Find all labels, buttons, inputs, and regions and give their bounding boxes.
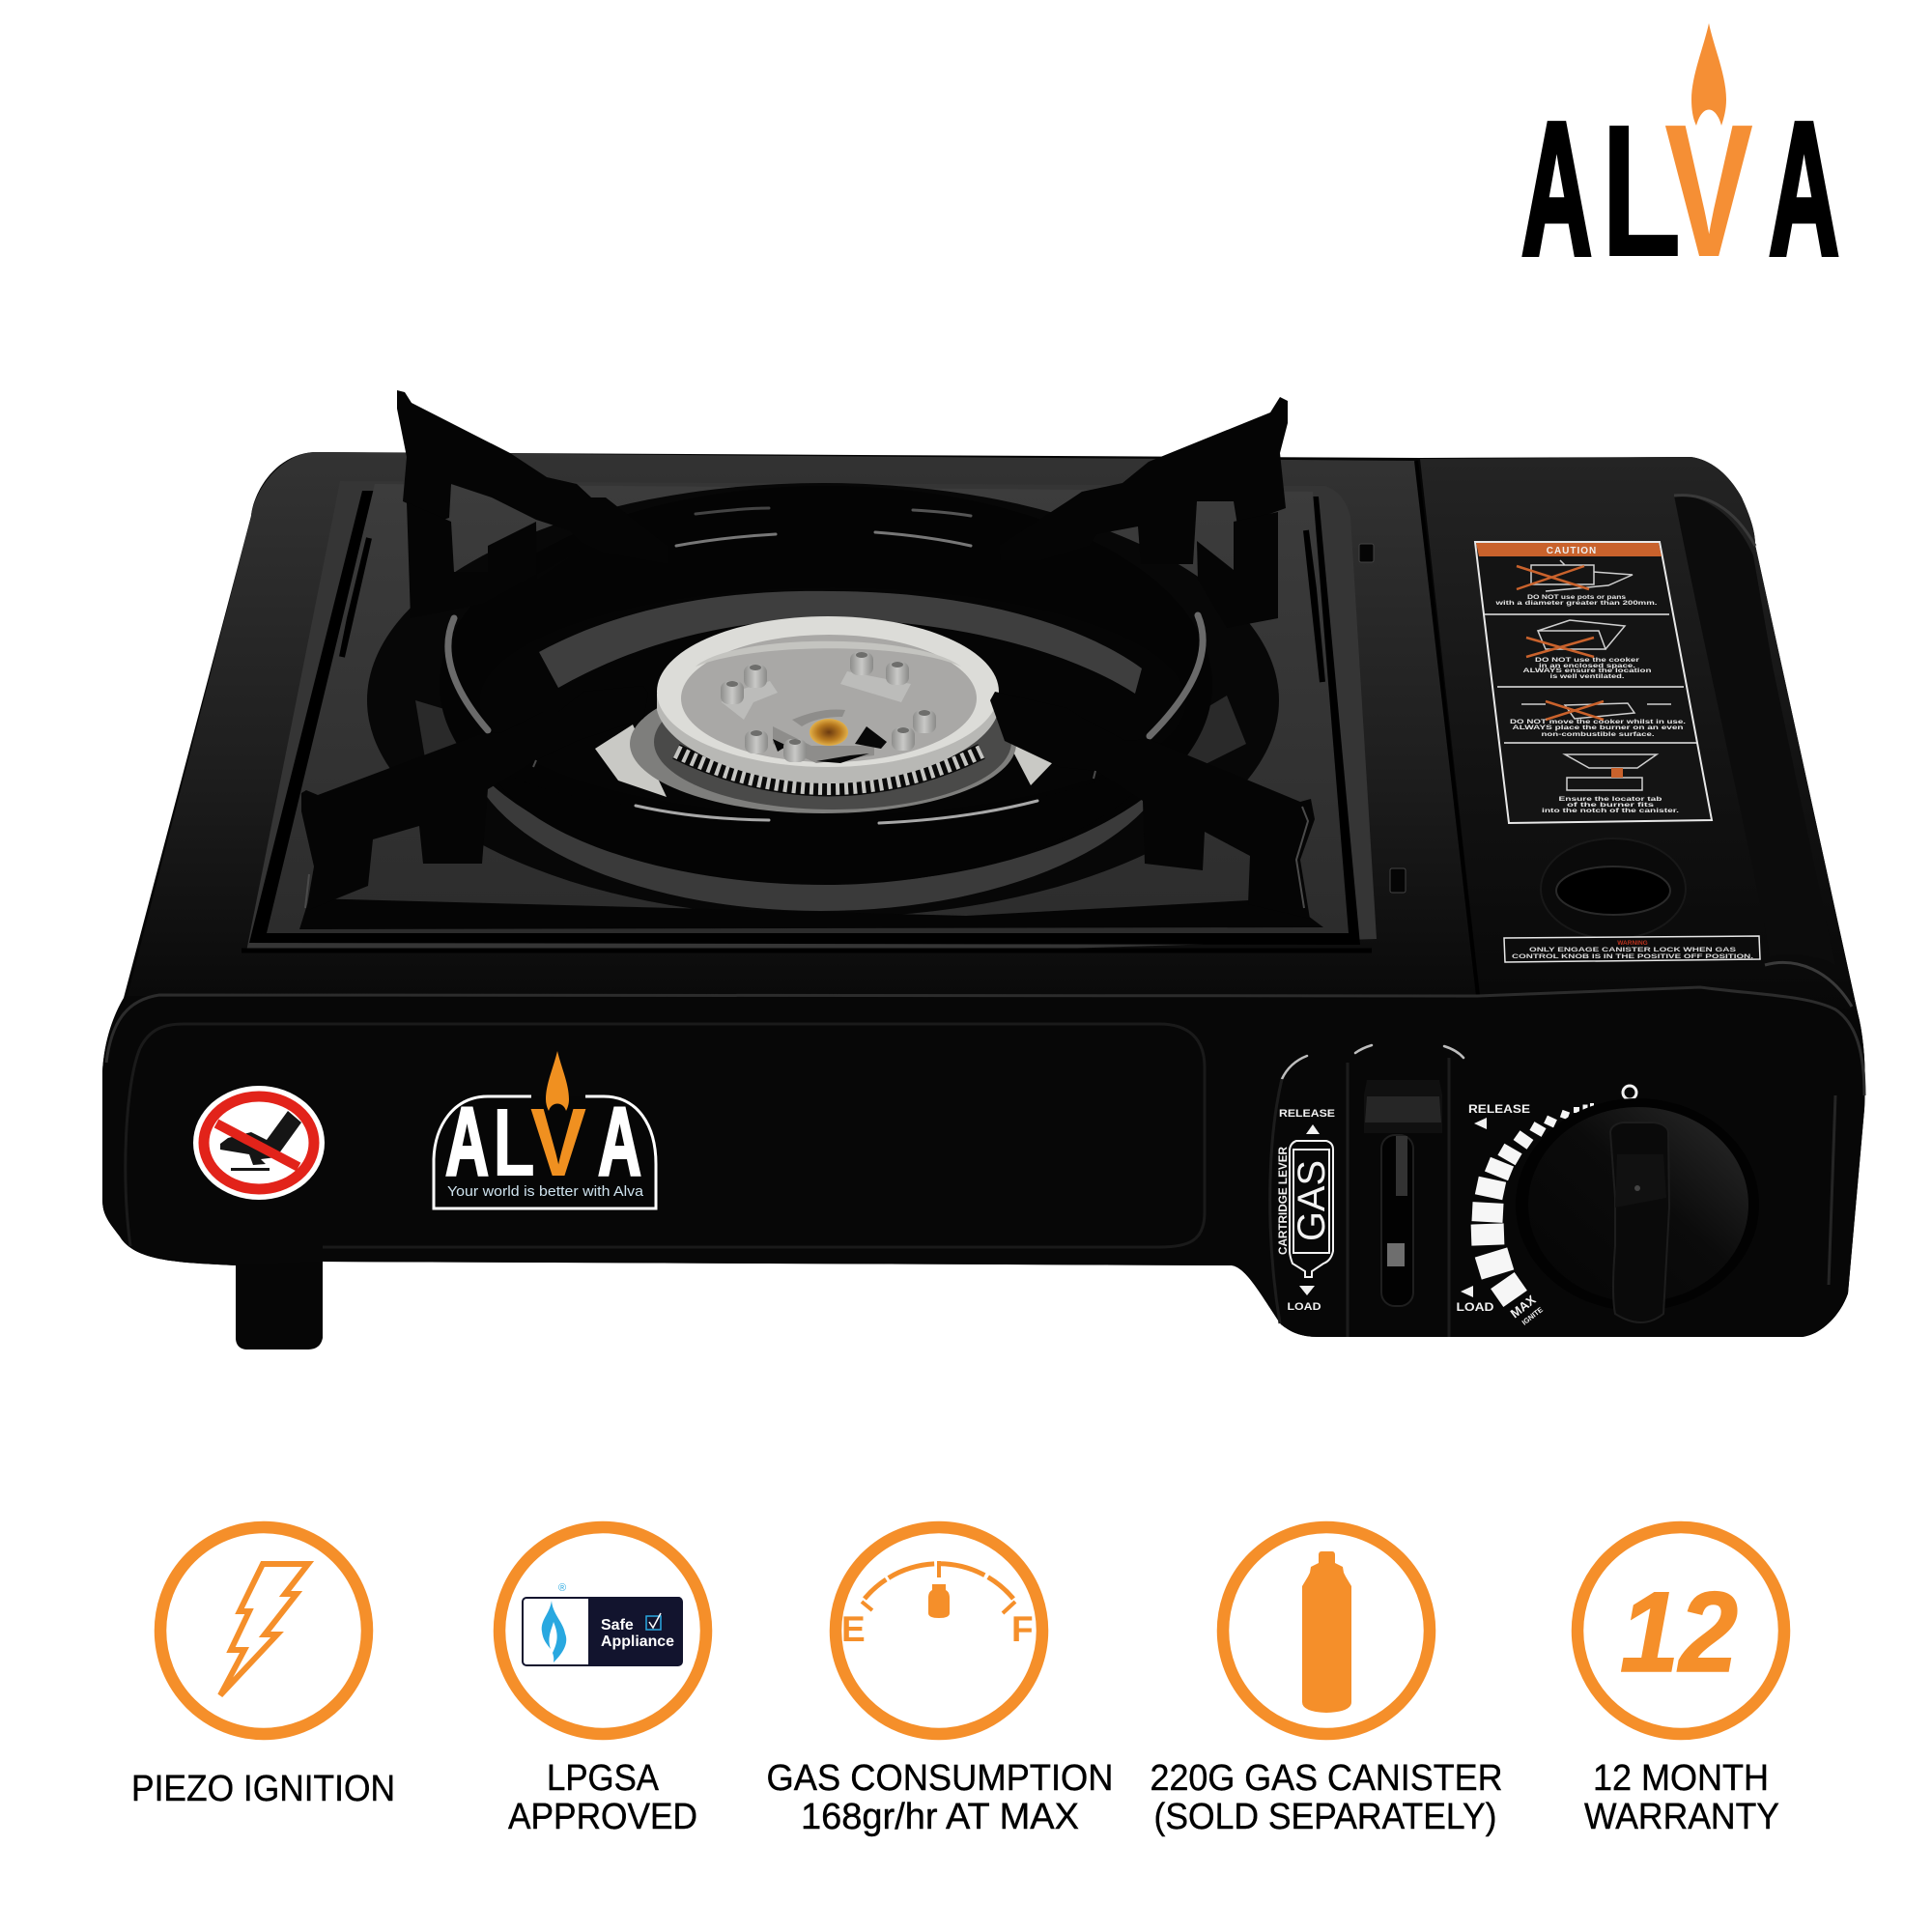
flame scale: [1471, 1103, 1594, 1307]
inner rim shade: [696, 641, 961, 667]
deck top surface: [128, 452, 1478, 996]
sticker wordmark: [445, 1088, 641, 1197]
lever: [1364, 1080, 1442, 1133]
recess rim: [246, 481, 1377, 952]
upper gray crescent: [539, 591, 1142, 694]
sticker wordmark: L: [493, 1089, 535, 1197]
right edge inner line: [1829, 1095, 1835, 1285]
front recessed panel: [126, 1024, 1205, 1247]
label: WARRANTY: [1584, 1797, 1779, 1837]
ring interior: [479, 587, 1186, 815]
hand pictogram: [220, 1111, 301, 1165]
icon: lightning bolt: [220, 1564, 308, 1695]
front face: [102, 987, 1865, 1337]
sticker flame: [546, 1051, 569, 1111]
bowl depression: [367, 483, 1279, 918]
lever slot: [1381, 1135, 1413, 1306]
lid right ridge: [1674, 496, 1835, 966]
recess gap: [249, 491, 1360, 945]
label: [1150, 1758, 1503, 1837]
logo wordmark: A: [1521, 83, 1592, 295]
comb teeth: [676, 752, 981, 788]
no touch sticker: [193, 1086, 325, 1200]
glossy slivers: [342, 530, 1322, 682]
caution text: ALWAYS place the burner on an even: [1513, 725, 1684, 731]
icon ring: [836, 1527, 1042, 1734]
label: [767, 1758, 1113, 1837]
brass injector: [810, 719, 848, 746]
alva sticker: [434, 1051, 656, 1208]
max ignite text: MAX: [1508, 1293, 1539, 1321]
label: GAS CONSUMPTION: [767, 1758, 1113, 1799]
label: APPROVED: [508, 1797, 697, 1837]
label: PIEZO IGNITION: [131, 1769, 395, 1809]
front ring band: [488, 749, 1164, 885]
arm reflection: back left: [407, 502, 580, 618]
icon: safe appliance badge: Appliance: [601, 1634, 674, 1650]
caution text: of the burner fits: [1567, 803, 1655, 809]
icon ring: [160, 1527, 367, 1734]
icon: safe appliance badge: Safe: [601, 1617, 634, 1634]
lid slots: [1359, 544, 1374, 562]
logo flame: [1691, 23, 1726, 126]
pan support arm: front left: [301, 686, 648, 911]
cylinder outline: [1290, 1141, 1333, 1277]
label: [1584, 1758, 1779, 1837]
caution pictograms: [1521, 560, 1671, 790]
sticker wordmark: V: [530, 1089, 586, 1197]
gas cartridge graphic: [1276, 1108, 1335, 1313]
burner base: [630, 674, 1016, 813]
pan support arm: back right: [999, 397, 1288, 564]
canister lid: [1420, 457, 1858, 1012]
caution text: into the notch of the canister.: [1542, 809, 1680, 814]
recess floor: [267, 484, 1349, 933]
icon ring: [1223, 1527, 1430, 1734]
feature: piezo ignition: [131, 1527, 395, 1809]
stove product photo: [102, 390, 1865, 1350]
burner plate: [681, 635, 977, 762]
feature: warranty: [1577, 1527, 1784, 1837]
caution text: with a diameter greater than 200mm.: [1494, 601, 1658, 607]
dark vent holes: [773, 726, 887, 763]
caution label: [1475, 542, 1712, 823]
warning label: ONLY ENGAGE CANISTER LOCK WHEN GAS: [1529, 947, 1737, 953]
logo wordmark: V: [1664, 85, 1753, 297]
dial release and load marks: [1457, 1104, 1530, 1314]
front ledge line: [242, 949, 1372, 952]
logo wordmark: [1521, 83, 1839, 297]
flame port brackets: [722, 671, 911, 720]
lower gray crescent: [464, 557, 1179, 911]
control panel: [1270, 1045, 1835, 1337]
stove body silhouette: [102, 452, 1865, 1350]
off marker: [1623, 1086, 1636, 1099]
caution text: ALWAYS ensure the location: [1522, 668, 1652, 674]
burner rim side: [657, 694, 999, 783]
feature: lpgsa approved: [499, 1527, 706, 1837]
pan support arm: back left: [397, 390, 668, 564]
dial release and load marks: RELEASE: [1468, 1104, 1530, 1116]
sticker outline: [434, 1096, 656, 1208]
caution header: [1476, 543, 1662, 556]
front ring highlight: [636, 801, 1037, 823]
caution dividers: [1485, 614, 1697, 743]
logo wordmark: A: [1769, 83, 1839, 295]
sticker tagline: Your world is better with Alva: [447, 1184, 644, 1200]
control knob: [1516, 1098, 1759, 1311]
caution text: is well ventilated.: [1549, 674, 1625, 680]
icon: fuel gauge: F: [1011, 1609, 1034, 1649]
caution label: CAUTION: [1547, 546, 1597, 556]
label: 12 MONTH: [1593, 1758, 1769, 1799]
bowl reflections: [415, 696, 1246, 773]
caution frame: [1475, 542, 1712, 823]
caution text: Ensure the locator tab: [1559, 797, 1662, 803]
sticker wordmark: A: [598, 1088, 641, 1196]
panel recess outlines: [1282, 1045, 1463, 1079]
caution text: non-combustible surface.: [1542, 732, 1655, 738]
icon: canister: [1302, 1551, 1351, 1713]
lower black reflections: [299, 898, 1323, 929]
label: LPGSA: [547, 1758, 660, 1799]
port cylinders: [721, 652, 936, 762]
gas cartridge graphic: RELEASE: [1279, 1108, 1335, 1120]
pan support arm: front right: [990, 692, 1315, 919]
warning label: CONTROL KNOB IS IN THE POSITIVE OFF POSITION.: [1512, 953, 1753, 960]
icon: safe appliance badge: ®: [558, 1582, 566, 1594]
lid ridge highlights: [1674, 496, 1852, 1007]
arm gloss glints: [305, 760, 1308, 908]
caution text: DO NOT move the cooker whilst in use.: [1510, 720, 1687, 725]
label: (SOLD SEPARATELY): [1153, 1797, 1497, 1837]
feature: gas consumption: [767, 1527, 1113, 1837]
lid seam: [1416, 461, 1478, 996]
dial release and load marks: LOAD: [1457, 1302, 1493, 1314]
caution text: DO NOT use the cooker: [1535, 658, 1640, 664]
label: 168gr/hr AT MAX: [801, 1797, 1079, 1837]
burner rim top: [657, 616, 999, 767]
ring highlights: [448, 508, 1203, 736]
center spars: [773, 709, 874, 763]
logo wordmark: L: [1601, 85, 1682, 297]
icon ring: [1577, 1527, 1784, 1734]
control panel: IGNITE: [1520, 1305, 1545, 1327]
icon: number 12: 12: [1620, 1569, 1738, 1696]
drip plate slivers: [595, 724, 1054, 797]
feature: gas canister: [1150, 1527, 1503, 1837]
label: 220G GAS CANISTER: [1150, 1758, 1503, 1799]
caution red crosses: [1517, 566, 1604, 720]
warning label: [1504, 936, 1760, 962]
label: [508, 1758, 697, 1837]
gas cartridge graphic: LOAD: [1287, 1301, 1321, 1313]
gas cartridge graphic: CARTRIDGE LEVER: [1276, 1147, 1290, 1255]
warning label: WARNING: [1617, 940, 1648, 947]
brand logo: [1521, 23, 1839, 297]
burner assembly: [630, 616, 1016, 813]
sticker wordmark: A: [445, 1088, 489, 1196]
icon ring: [499, 1527, 706, 1734]
arm reflection: back right: [1197, 512, 1278, 628]
canister lid hole: [1541, 838, 1686, 939]
caution text: in an enclosed space.: [1539, 664, 1636, 669]
burner bowl: [654, 674, 1011, 810]
icon: safe appliance badge: [523, 1582, 682, 1665]
knob handle: [1610, 1122, 1669, 1322]
front edge highlight: [106, 987, 1864, 1095]
icon: fuel gauge: [841, 1561, 1034, 1649]
caution text: [1494, 595, 1687, 814]
gas cartridge graphic: GAS: [1291, 1160, 1333, 1241]
icon: fuel gauge: E: [841, 1609, 866, 1649]
caution text: DO NOT use pots or pans: [1527, 595, 1627, 601]
pan support ring: [440, 486, 1212, 884]
